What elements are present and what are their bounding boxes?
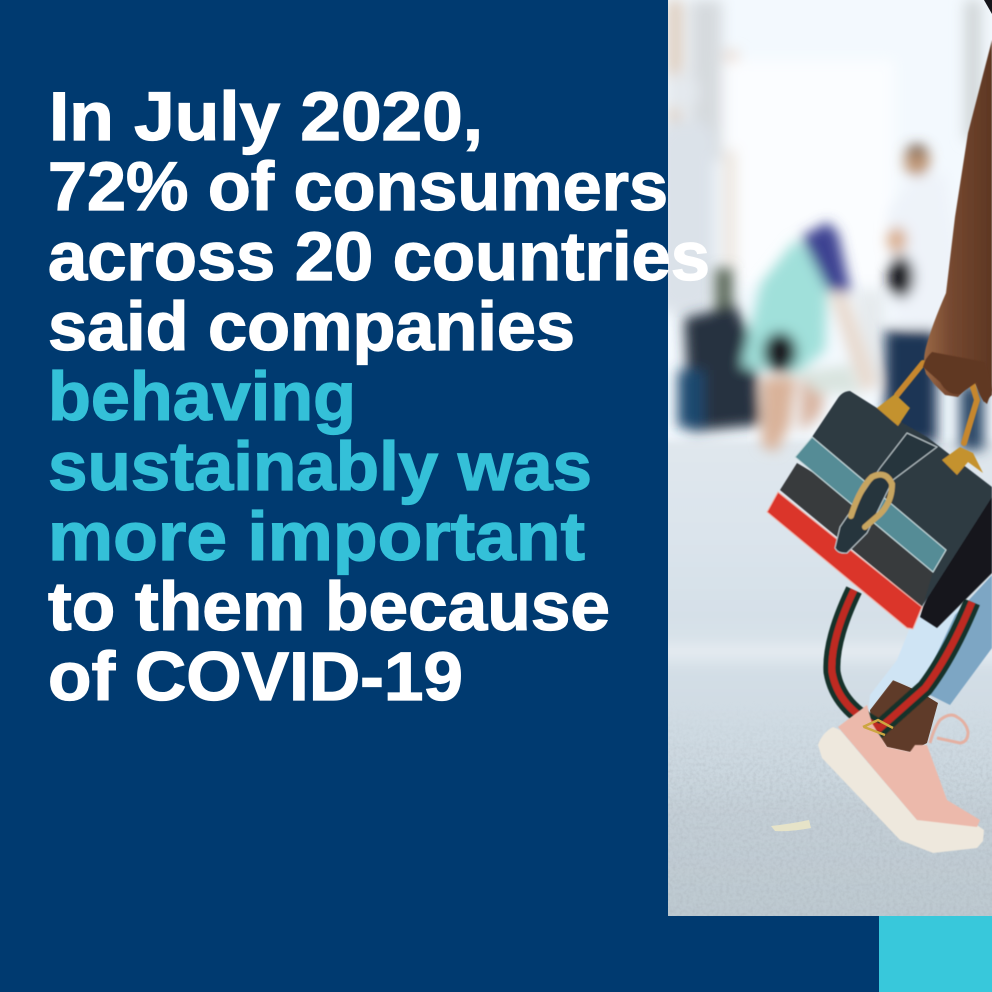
headline line: said companies: said companies	[48, 288, 575, 365]
gold hardware right	[942, 447, 983, 475]
fingers over handle	[923, 352, 992, 404]
shoulder strap	[832, 590, 972, 728]
bag upper body	[812, 391, 992, 605]
jeans	[868, 575, 992, 712]
leaf on the ground	[771, 820, 811, 831]
teal stripe	[795, 437, 946, 572]
sneaker sole	[818, 727, 984, 853]
photo: woman walking with handbag	[640, 0, 992, 930]
bag lower body	[780, 463, 945, 607]
asphalt texture	[668, 747, 992, 916]
blurred street background	[655, 0, 981, 380]
strap buckle	[863, 720, 893, 735]
jeans blue side	[930, 575, 992, 706]
headline line: of COVID-19: of COVID-19	[48, 638, 463, 715]
jeans light side	[868, 605, 960, 712]
bamboo handle	[897, 363, 977, 443]
leg	[870, 680, 938, 752]
dark sleeve corner	[984, 0, 992, 14]
highlighted line: behaving: behaving	[48, 358, 356, 435]
sneaker	[818, 705, 984, 853]
headline line: to them because: to them because	[48, 568, 610, 645]
street ground	[668, 440, 992, 916]
bag strap tongue	[835, 433, 937, 553]
red stripe	[767, 492, 922, 629]
sneaker lace loop	[930, 715, 968, 743]
handbag	[767, 363, 992, 629]
gold hardware left	[877, 394, 910, 426]
blurred crowd	[678, 144, 984, 452]
headline line: across 20 countries: across 20 countries	[48, 218, 710, 295]
cyan corner block	[879, 916, 992, 992]
arm and hand	[924, 40, 992, 402]
sneaker upper	[838, 705, 980, 827]
highlighted line: more important: more important	[48, 498, 585, 575]
highlighted line: sustainably was: sustainably was	[48, 428, 592, 505]
gold horseshoe clasp	[851, 475, 892, 527]
bag gusset	[920, 497, 992, 628]
headline	[48, 78, 710, 715]
headline line: 72% of consumers: 72% of consumers	[48, 148, 668, 225]
headline line: In July 2020,: In July 2020,	[49, 78, 483, 155]
